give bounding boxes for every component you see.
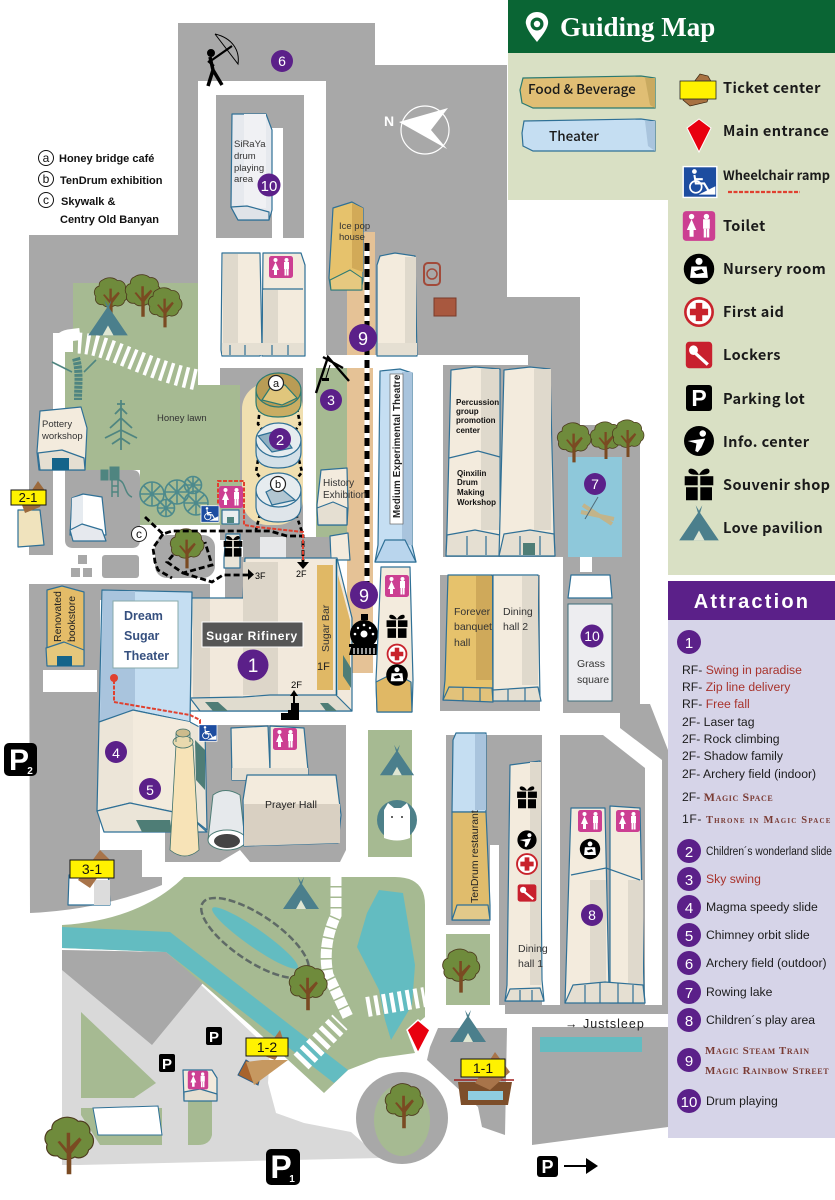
legend lockers (686, 342, 781, 368)
building: Percussion group & Qinxilin: Qinxilin (457, 469, 486, 478)
trees and tent on lawn (88, 275, 182, 335)
tree boxes (443, 949, 480, 993)
Justsleep teal strip (540, 1037, 642, 1052)
circled letters key: TenDrum exhibition (60, 175, 163, 187)
building: Sugar Rifinery (190, 558, 352, 711)
label plate: Sugar Rifinery (206, 629, 298, 643)
building: Percussion group & Qinxilin: Drum (457, 478, 478, 487)
building: Forever banquet hall: hall (454, 637, 470, 649)
silo a (256, 373, 301, 417)
south tent (450, 1010, 486, 1042)
marker 9 north: 9 (358, 329, 368, 349)
legend: Food & Beverage tag (520, 76, 655, 108)
building: Dining hall 1: hall 1 (518, 958, 543, 970)
parking lot (62, 950, 380, 1165)
Dream Sugar Theater: Sugar (124, 629, 160, 643)
building: Pottery workshop: workshop (41, 431, 83, 442)
building: SiRaYa drum playing area: SiRaYa (234, 139, 266, 150)
legend ticket center (680, 74, 821, 106)
building: Dining hall 1 (505, 761, 548, 1001)
grass square: 10 (584, 628, 600, 644)
statue tree (52, 358, 96, 400)
building: Sugar Rifinery: Sugar Bar (320, 604, 332, 652)
honey lawn (65, 283, 240, 525)
building: Percussion group & Qinxilin: center (456, 426, 480, 435)
train track (364, 243, 370, 600)
main entrance marker (407, 1020, 430, 1053)
circled letters key: Centry Old Banyan (60, 214, 159, 226)
building: Children's play area: 8 (588, 907, 596, 923)
building: Forever banquet hall (443, 575, 493, 702)
building: Percussion group & Qinxilin: Making (457, 488, 485, 497)
attraction rows 2 to 10: Chimney orbit slide (706, 928, 810, 942)
ticket 1-2 (238, 1030, 288, 1085)
legend lockers: Lockers (723, 344, 781, 365)
building: Percussion group & Qinxilin: group (456, 407, 479, 416)
building: TenDrum restaurant: TenDrum restaurant (469, 810, 481, 903)
train icon (349, 614, 380, 655)
skywalk arrows and floor labels: 2F (296, 569, 307, 579)
attraction rows 2 to 10: Drum playing (706, 1094, 778, 1108)
legend love pavilion (679, 505, 823, 540)
building: Prayer Hall: Prayer Hall (265, 799, 317, 811)
archer icon (208, 34, 238, 86)
marker 3: 3 (327, 392, 335, 408)
silo a: a (273, 378, 280, 390)
marker 9 north (349, 324, 377, 352)
attraction 1 list: RF- Free fall (682, 697, 750, 711)
attraction rows 2 to 10: 5 (685, 928, 693, 945)
parking direction sign (537, 1156, 598, 1177)
attraction rows 2 to 10: Archery field (outdoor) (706, 956, 827, 970)
header: Guiding Map (508, 0, 835, 53)
lake trees (557, 420, 644, 462)
building: Pottery workshop (37, 407, 87, 470)
marker 6: 6 (278, 53, 286, 69)
attraction 1 list: 2F- Rock climbing (682, 732, 780, 746)
building: Forever banquet hall: Forever (454, 606, 491, 618)
attraction rows 2 to 10: Sky swing (706, 872, 761, 886)
ticket 1-1 booth: 1-1 (473, 1060, 493, 1076)
building: Percussion group & Qinxilin: promotion (456, 416, 496, 425)
silo 2: 2 (276, 432, 284, 449)
parking P1 sign (266, 1149, 300, 1185)
exhaust cup (208, 790, 246, 850)
circled letters key: b (43, 172, 50, 186)
legend: Food & Beverage tag: Food & Beverage (528, 78, 636, 98)
legend panel background (508, 53, 835, 575)
park (62, 877, 425, 1093)
marker 9 south: 9 (359, 586, 369, 606)
ticket 3-1 (68, 850, 114, 905)
building: Sugar Rifinery: 1F (317, 661, 330, 673)
Dream Sugar Theater (99, 590, 200, 726)
building: SiRaYa drum playing area: drum (234, 151, 256, 162)
ramp icon at theater (199, 725, 217, 741)
green strips (316, 368, 490, 1005)
parking P1 sign: P (270, 1149, 292, 1185)
service building by walkway (376, 567, 413, 712)
legend: icons and labels (679, 74, 830, 540)
building: SiRaYa drum playing area: playing (234, 163, 264, 174)
building: History Exhibition (317, 468, 366, 525)
attraction rows 2 to 10: 6 (685, 956, 693, 973)
skywalk arrows and floor labels (248, 562, 309, 581)
parking P2 sign: P (9, 744, 29, 777)
building: Percussion group & Qinxilin: Percussion (456, 398, 499, 407)
swing icon (316, 357, 349, 393)
silo b (256, 473, 301, 522)
bridge strip above refinery (243, 533, 350, 560)
parking P2 sign: 2 (27, 766, 33, 777)
Dream Sugar Theater: Dream (124, 609, 163, 623)
attraction 1 list: 2F- Shadow family (682, 749, 784, 763)
parking P1 sign: 1 (289, 1174, 295, 1185)
building: Renovated bookstore: bookstore (66, 596, 78, 642)
legend souvenir shop (685, 469, 830, 500)
building right of ice pop (377, 253, 417, 356)
ticket 1-2: 1-2 (257, 1039, 277, 1055)
attraction header (668, 581, 835, 620)
grass square (568, 575, 612, 701)
map ground: gray plots (29, 23, 668, 1145)
legend nursery room (684, 254, 826, 284)
building: Ice pop house: house (339, 232, 365, 243)
white road details (43, 128, 592, 692)
legend ticket center: Ticket center (723, 77, 821, 98)
medium theatre building (375, 369, 416, 562)
attraction 1 list: 1 (685, 635, 693, 652)
building: SiRaYa drum playing area: area (234, 174, 254, 185)
attraction rows 2 to 10 (677, 839, 832, 1113)
legend wheelchair ramp: Wheelchair ramp (723, 165, 830, 184)
playground (101, 467, 132, 497)
legend first aid (685, 298, 784, 326)
building: Renovated bookstore (46, 586, 84, 666)
chimney (170, 729, 199, 856)
medium theatre building: Medium Experimental Theatre (392, 374, 403, 518)
circled letters key: a (43, 151, 50, 165)
building right of Percussion (499, 367, 555, 556)
legend first aid: First aid (723, 301, 784, 322)
grass square: square (577, 674, 609, 686)
attraction rows 2 to 10: 9 (685, 1053, 693, 1070)
building: Prayer Hall (243, 775, 341, 846)
wheelchair route upper (218, 481, 303, 560)
building: SiRaYa drum playing area: 10 (261, 178, 277, 195)
striped path across lawn (59, 334, 197, 380)
attraction 1 list: RF- Swing in paradise (682, 663, 802, 677)
stairs to 2F (281, 680, 302, 720)
icon: toilet top (269, 256, 293, 278)
attraction 1 list: 1F- Throne in Magic Space (682, 812, 831, 826)
building pair top centre (221, 253, 305, 356)
building: slides 4 and 5: 5 (146, 782, 154, 798)
roundabout (356, 1072, 448, 1164)
building: Percussion group & Qinxilin: Workshop (457, 498, 496, 507)
building: Dining hall 2: hall 2 (503, 621, 528, 633)
attraction rows 2 to 10: 8 (685, 1013, 693, 1030)
panel: Attraction (668, 581, 835, 1138)
building: Dining hall 1: Dining (518, 943, 548, 955)
honey lawn label: Honey lawn (157, 413, 207, 424)
marker c: c (136, 527, 142, 541)
header: Guiding Map: Guiding Map (560, 12, 715, 42)
pine tree (105, 400, 137, 450)
icon: toilet above Prayer Hall (273, 728, 297, 750)
legend info center: Info. center (723, 431, 810, 452)
ticket 2-1: 2-1 (19, 490, 37, 505)
marker 7 with raft (581, 473, 614, 524)
attraction rows 2 to 10: Rowing lake (706, 985, 773, 999)
marker 9 south (350, 581, 378, 609)
circled letters key: Honey bridge café (59, 153, 154, 165)
building: Forever banquet hall: banquet (454, 621, 492, 633)
legend info center (684, 426, 810, 456)
legend main entrance (687, 119, 829, 152)
legend: Theater tag (522, 119, 655, 151)
marker 1: 1 (248, 656, 258, 677)
Justsleep direction: → Justsleep (565, 1017, 645, 1031)
silo 2 (256, 423, 301, 468)
legend parking lot: Parking lot (723, 388, 805, 409)
legend main entrance: Main entrance (723, 120, 829, 141)
building: SiRaYa drum playing area (231, 114, 280, 220)
building: slides 4 and 5: 4 (112, 745, 120, 761)
legend souvenir shop: Souvenir shop (723, 474, 830, 495)
legend wheelchair ramp (683, 165, 830, 197)
toilet annex with ramp (201, 486, 243, 524)
skywalk arrows and floor labels: 3F (255, 571, 266, 581)
attraction 1 list: RF- Zip line delivery (682, 680, 791, 694)
tree with skywalk (170, 529, 204, 568)
ticket 1-1 booth (454, 1052, 514, 1105)
attraction 1 list: 2F- Laser tag (682, 715, 754, 729)
red train and brick icons (424, 263, 456, 316)
parking signs: P (209, 1029, 219, 1046)
building: Pottery workshop: Pottery (42, 419, 72, 430)
building: slides 4 and 5 (97, 710, 207, 832)
building: Percussion group & Qinxilin (446, 367, 501, 556)
marker 3 (320, 389, 342, 411)
attraction header: Attraction (694, 591, 810, 613)
building: History Exhibition: Exhibition (323, 490, 366, 501)
legend toilet: Toilet (723, 215, 766, 236)
stairs to 2F: 2F (291, 680, 302, 691)
attraction 1 list: 2F- Magic Space (682, 790, 773, 804)
Dream Sugar Theater: Theater (124, 649, 169, 663)
legend love pavilion: Love pavilion (723, 517, 823, 538)
ticket 3-1: 3-1 (82, 861, 102, 877)
label plate (202, 622, 303, 647)
building: History Exhibition: History (323, 478, 354, 489)
silo b: b (275, 479, 281, 491)
parking direction sign: P (541, 1157, 554, 1177)
legend parking lot (686, 385, 805, 411)
compass (384, 106, 449, 154)
building: Dining hall 2 (493, 575, 541, 701)
attraction rows 2 to 10: 7 (685, 985, 693, 1002)
attraction rows 2 to 10: 3 (685, 872, 693, 889)
attraction rows 2 to 10: Magic Rainbow Street (705, 1065, 829, 1077)
restroom in parking (183, 1070, 217, 1101)
marker c (132, 526, 146, 542)
lake (568, 457, 622, 557)
circled letters key: Skywalk & (61, 196, 115, 208)
building: Ice pop house (329, 202, 370, 290)
legend nursery room: Nursery room (723, 258, 826, 279)
circled letters key: c (43, 193, 49, 207)
marker 7 with raft: 7 (591, 476, 599, 492)
parking P2 sign (4, 743, 37, 777)
building: Ice pop house: Ice pop (339, 221, 370, 232)
marker 1 (238, 650, 268, 680)
legend parking lot: P (691, 385, 707, 411)
attraction rows 2 to 10: 2 (685, 844, 693, 861)
attraction rows 2 to 10: 10 (681, 1094, 697, 1111)
small white building by playground (70, 494, 106, 541)
parking signs (159, 1027, 222, 1073)
parking signs: P (162, 1056, 172, 1073)
legend toilet (683, 211, 766, 241)
attraction 1 list (677, 630, 831, 826)
attraction rows 2 to 10: Magic Steam Train (705, 1045, 810, 1057)
trees in park (45, 966, 423, 1174)
tan walkway (347, 232, 375, 673)
building and souvenir by skywalk (224, 534, 242, 568)
skywalk dashed route (145, 517, 303, 582)
building above Prayer Hall (231, 726, 308, 780)
building: TenDrum restaurant (452, 733, 490, 920)
building: Dining hall 2: Dining (503, 606, 533, 618)
compass: N (384, 113, 394, 129)
attraction rows 2 to 10: Children´s play area (706, 1013, 815, 1027)
attraction rows 2 to 10: 4 (685, 900, 693, 917)
building: Renovated bookstore: Renovated (52, 591, 64, 642)
tent and cat (377, 745, 417, 840)
attraction 1 list: 2F- Archery field (indoor) (682, 767, 816, 781)
wagon wheels (140, 476, 208, 517)
cream slide ground (242, 383, 303, 525)
bridges between silos (256, 408, 302, 532)
building: Children's play area (565, 806, 645, 1003)
circled letters key (38, 150, 163, 226)
grass square: Grass (577, 658, 605, 670)
legend: Theater tag: Theater (549, 125, 599, 145)
marker 6 (271, 50, 293, 72)
attraction rows 2 to 10: Magma speedy slide (706, 900, 818, 914)
park tent (283, 877, 319, 909)
ticket 2-1 (11, 481, 46, 547)
